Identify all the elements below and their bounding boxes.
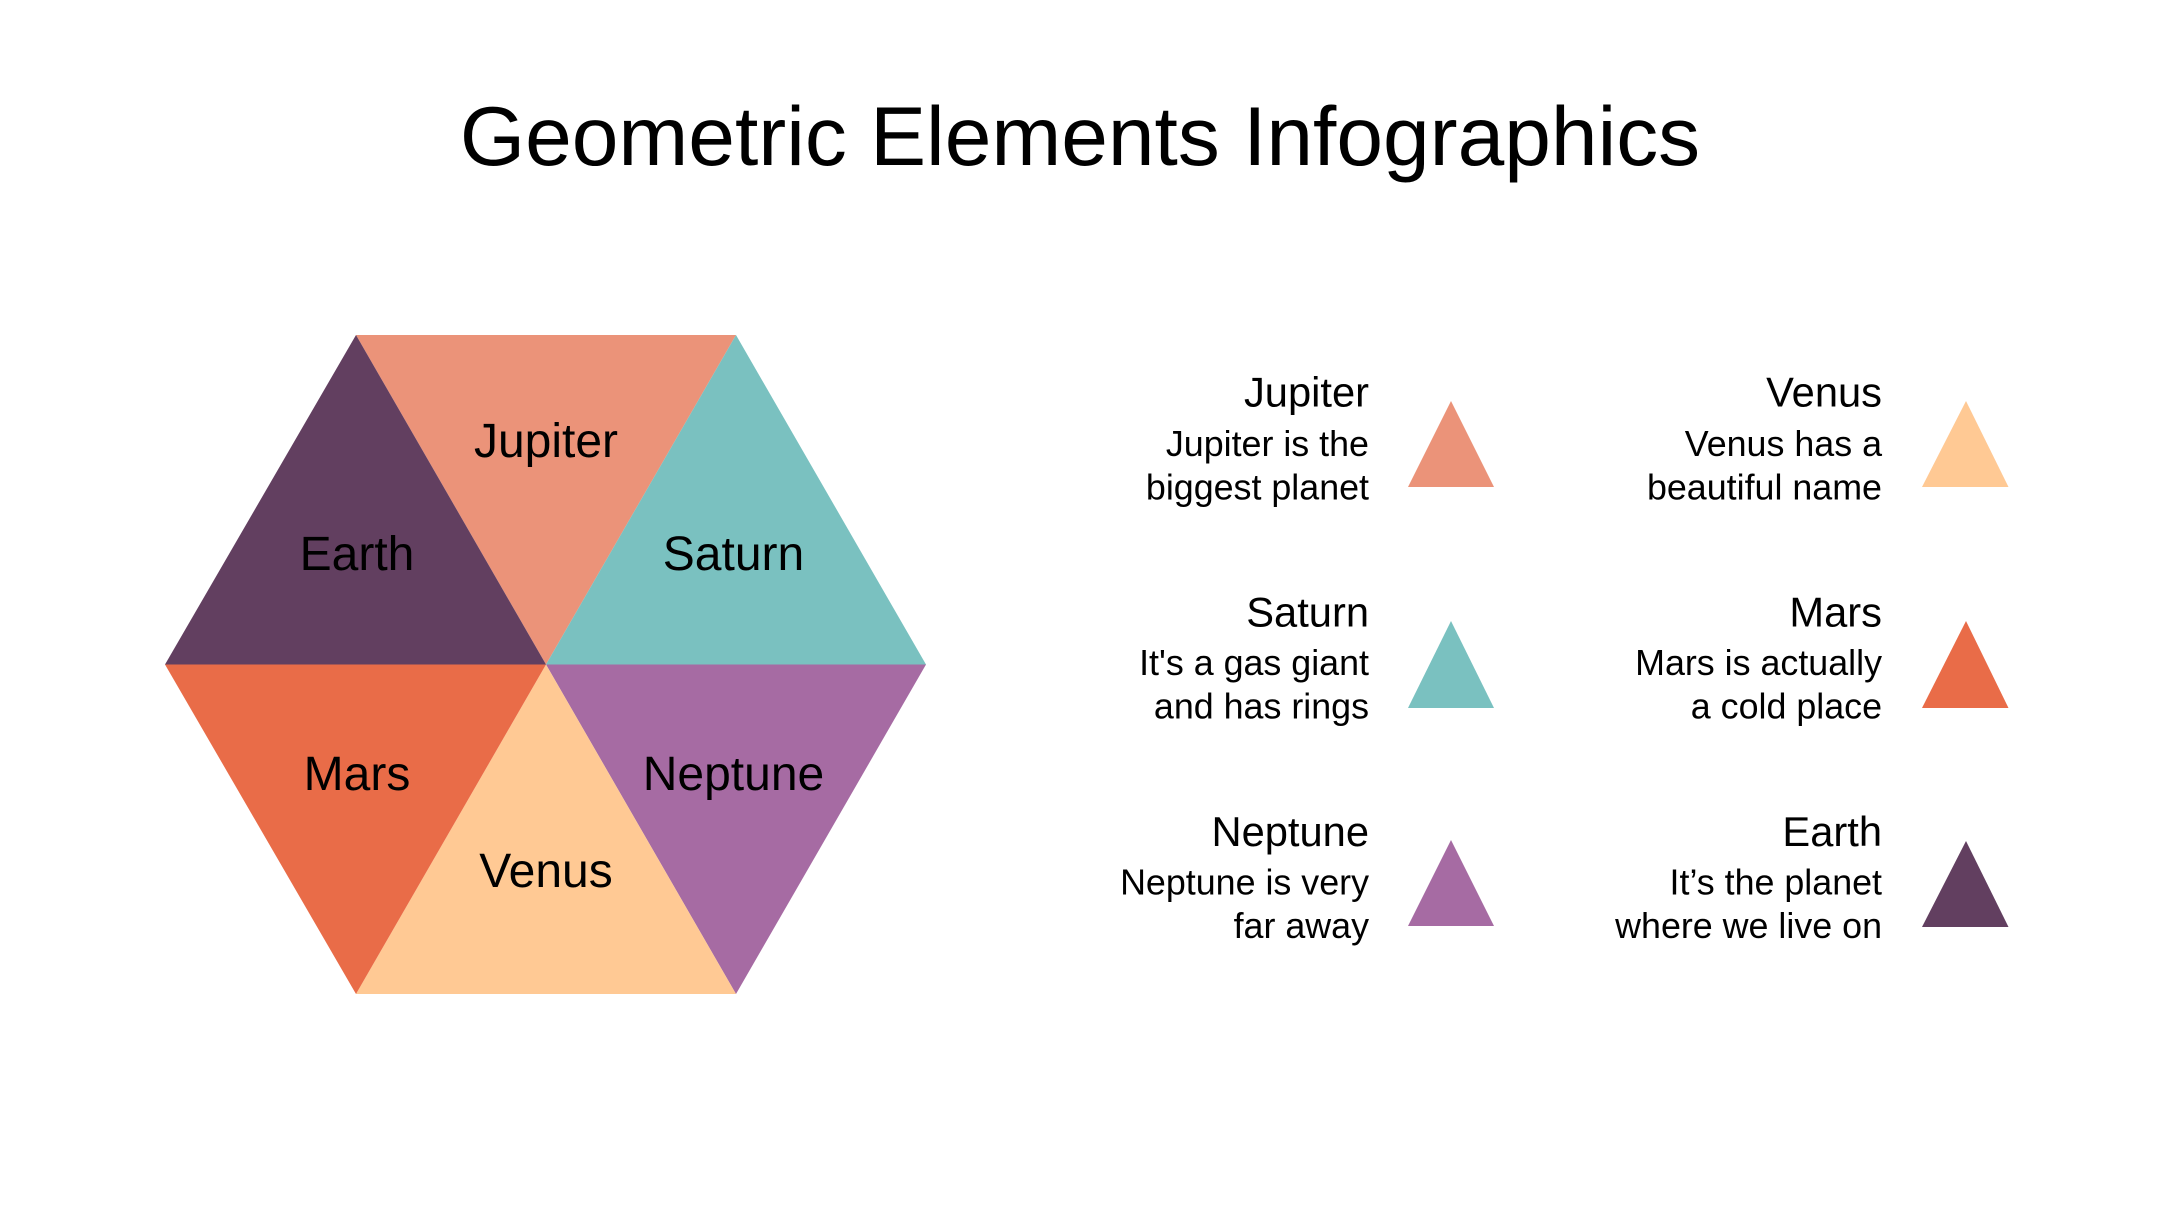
legend item: Neptune — [1120, 808, 1494, 946]
legend item: Mars: Mars — [1789, 588, 1882, 636]
legend item: Jupiter: Jupiter is the — [1166, 424, 1369, 464]
legend item: Mars: a cold place — [1691, 686, 1882, 726]
triangle: Venus: Venus — [479, 845, 613, 898]
legend item: Neptune: Neptune is very — [1120, 862, 1369, 902]
triangle: Jupiter — [356, 335, 736, 664]
triangle: Neptune — [546, 664, 926, 994]
triangle: Saturn — [546, 335, 926, 664]
hexagon diagram — [165, 335, 926, 994]
legend item: Saturn: It's a gas giant — [1139, 643, 1369, 683]
title: Geometric Elements Infographics — [460, 89, 1700, 183]
triangle: Jupiter: Jupiter — [474, 415, 618, 468]
legend item: Neptune: Neptune — [1212, 808, 1369, 855]
legend item: Mars — [1635, 588, 2008, 726]
legend item: Venus — [1647, 368, 2008, 508]
legend item: Earth — [1614, 808, 2008, 946]
legend item: Saturn: Saturn — [1246, 588, 1369, 636]
legend item: Saturn: and has rings — [1154, 686, 1369, 726]
legend item: Jupiter: biggest planet — [1146, 468, 1369, 508]
triangle: Mars — [165, 664, 546, 994]
legend item: Venus: Venus has a — [1685, 424, 1882, 464]
triangle: Venus — [356, 664, 736, 994]
legend item: Mars: Mars is actually — [1635, 643, 1882, 683]
legend item: Earth: Earth — [1782, 808, 1882, 855]
legend item: Venus: Venus — [1766, 368, 1882, 416]
legend item: Neptune: far away — [1234, 906, 1369, 946]
legend item: Jupiter — [1146, 368, 1494, 508]
triangle: Mars: Mars — [304, 748, 410, 801]
triangle: Neptune: Neptune — [643, 748, 824, 801]
triangle: Saturn: Saturn — [663, 528, 804, 581]
legend item: Jupiter: Jupiter — [1244, 368, 1369, 416]
legend item: Saturn — [1139, 588, 1494, 726]
triangle: Earth — [165, 335, 546, 664]
legend item: Earth: It’s the planet — [1670, 862, 1882, 902]
legend item: Venus: beautiful name — [1647, 468, 1882, 508]
triangle: Earth: Earth — [300, 528, 414, 581]
legend item: Earth: where we live on — [1614, 906, 1882, 946]
